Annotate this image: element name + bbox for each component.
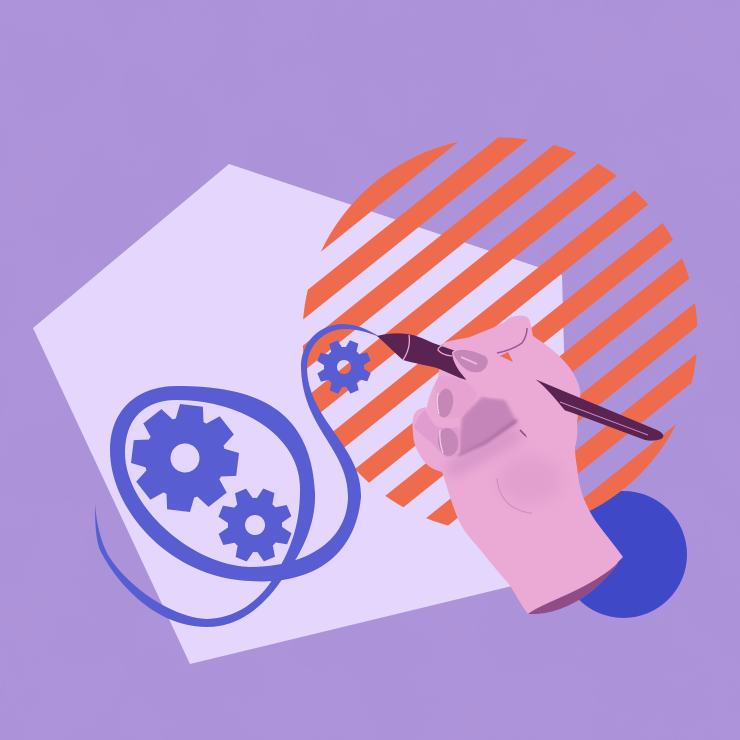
palm crease: [497, 478, 532, 513]
thumb root crease: [520, 430, 535, 442]
palm wrinkle area: [504, 462, 556, 498]
upper nail of lower fingers: [435, 388, 455, 418]
pen clip: [438, 344, 452, 356]
pen ring: [403, 335, 409, 360]
band below finger crease: [448, 432, 520, 472]
thumb nail: [453, 350, 488, 372]
finger crease line: [458, 420, 517, 455]
small gear: [309, 332, 379, 402]
striped orange circle: [302, 138, 698, 526]
thumb: [452, 349, 575, 448]
blue circle: [560, 491, 687, 618]
drawn blue line: [95, 324, 382, 627]
nail highlights: [437, 393, 443, 453]
upper curled finger: [436, 377, 438, 380]
hand silhouette: [412, 316, 623, 614]
pale pentagon sheet: [33, 164, 570, 664]
upper finger crease: [497, 328, 527, 353]
hand: [377, 316, 663, 614]
illustration: hand drawing gears on collage: [33, 138, 698, 664]
lower curled finger: [414, 410, 461, 457]
medium gear: [207, 477, 303, 573]
pen highlight: [560, 402, 648, 435]
pen: [377, 333, 663, 441]
large gear: [126, 399, 244, 517]
gap between fingers: [500, 352, 513, 362]
hand shading: [414, 376, 562, 504]
thumb nail highlight: [461, 357, 477, 364]
shadow under thumb: [458, 397, 517, 453]
lower nail of lower fingers: [436, 427, 460, 457]
wrist cut: [528, 561, 620, 614]
